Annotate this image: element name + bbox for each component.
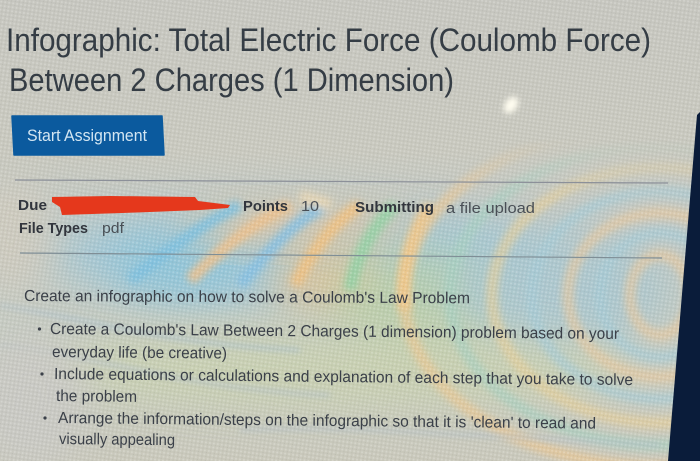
glare spot — [501, 94, 521, 116]
bullet 3: visually appealing — [59, 431, 175, 449]
bullet 1 — [38, 321, 620, 363]
bullet 3 — [43, 410, 596, 449]
points value: 10 — [301, 198, 319, 215]
start assignment button — [12, 116, 164, 155]
bullet 1: Create a Coulomb's Law Between 2 Charges (1 dimension) problem based on your — [50, 321, 620, 343]
red redaction scribble — [52, 196, 230, 215]
start assignment button: Start Assignment — [27, 127, 147, 145]
title: Infographic: Total Electric Force (Coulomb Force) — [6, 22, 651, 58]
intro sentence: Create an infographic on how to solve a Coulomb's Law Problem — [24, 288, 470, 307]
submission type: a file upload — [446, 200, 535, 217]
bullet 2: the problem — [56, 388, 137, 406]
moire colour bands — [0, 156, 692, 461]
points: Points — [243, 198, 288, 215]
submitting: Submitting — [355, 199, 434, 216]
assignment details — [18, 197, 535, 237]
bullet 1: everyday life (be creative) — [52, 344, 227, 363]
instructions — [24, 288, 633, 449]
dark monitor bezel — [668, 112, 700, 461]
due label: Due — [18, 197, 47, 214]
bullet 3: Arrange the information/steps on the infographic so that it is 'clean' to read and — [58, 410, 596, 433]
title: Between 2 Charges (1 Dimension) — [9, 62, 454, 98]
file types: File Types — [19, 220, 88, 237]
bullet 2 — [40, 366, 633, 406]
bullet 2: Include equations or calculations and explanation of each step that you take to solve — [54, 366, 633, 389]
file type value: pdf — [102, 220, 125, 237]
title — [6, 22, 651, 98]
